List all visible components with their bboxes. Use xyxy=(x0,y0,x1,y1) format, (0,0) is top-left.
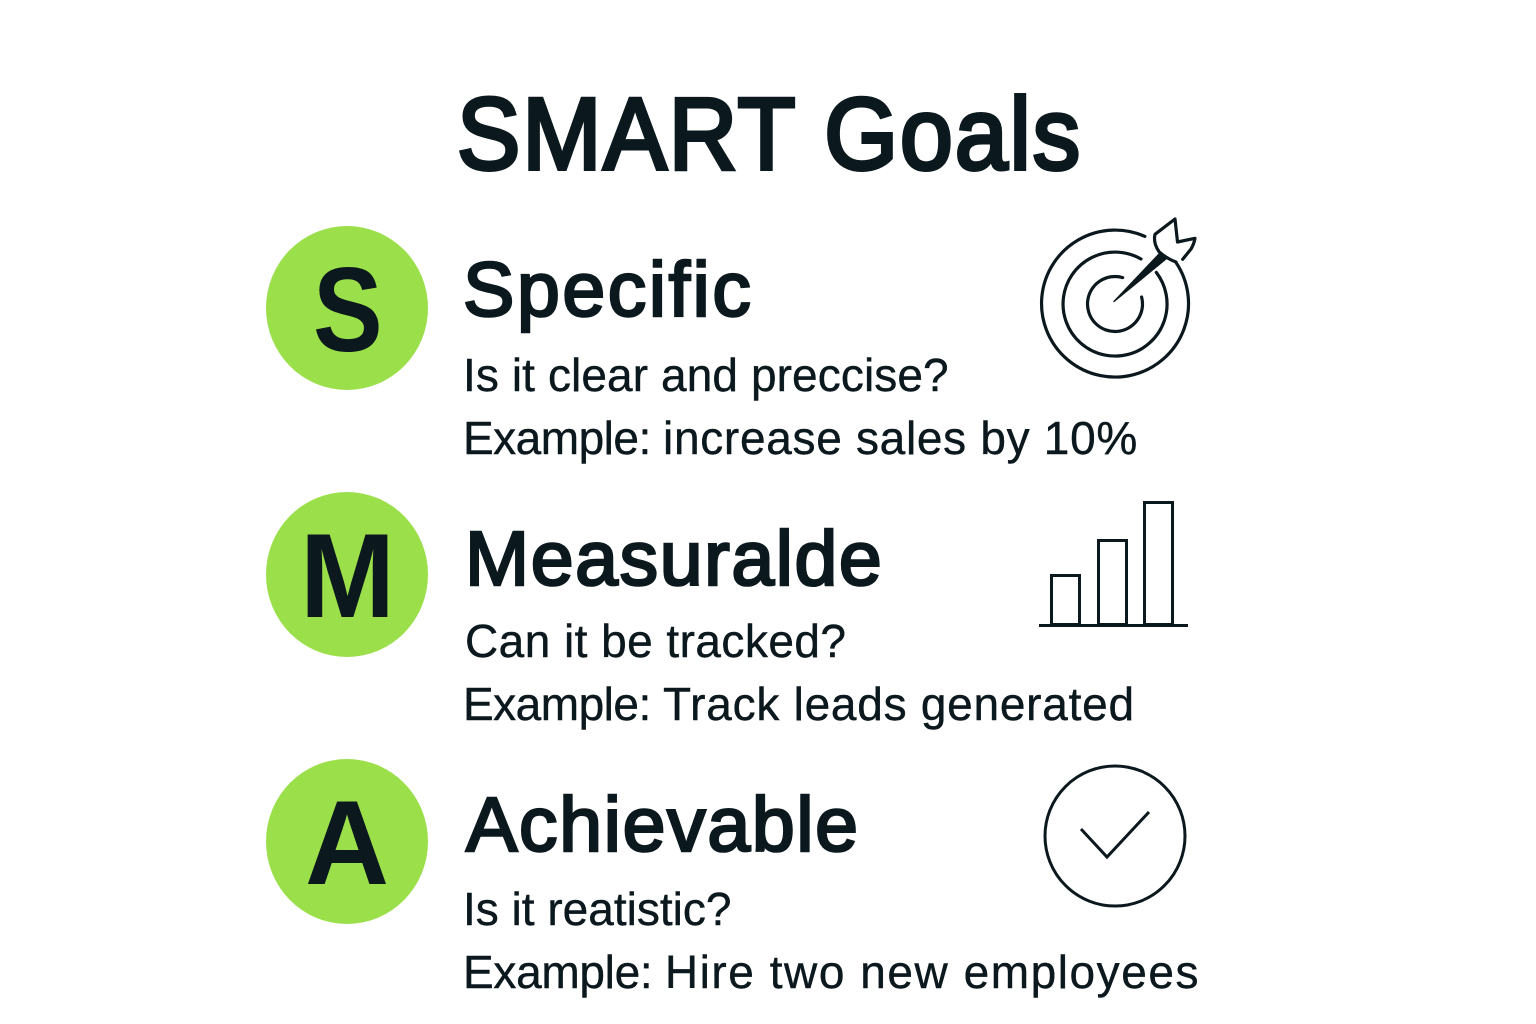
heading: Measuralde: Measuralde xyxy=(465,516,883,602)
badge: M: M xyxy=(300,509,395,643)
heading: Achievable: Achievable xyxy=(466,782,860,868)
badge: M xyxy=(266,492,428,657)
text: Measurable question: Can it be tracked? xyxy=(465,615,846,667)
heading: Specific: Specific xyxy=(463,247,753,333)
icon: target with arrow xyxy=(1040,217,1197,379)
text: Specific example: Example: increase sales by 10% xyxy=(463,412,1138,464)
text: Specific question: Is it clear and preccise? xyxy=(463,349,949,401)
icon: bar chart xyxy=(1039,501,1188,627)
badge: A: A xyxy=(305,776,389,910)
text: Achievable question: Is it reatistic? xyxy=(463,883,731,935)
icon: check mark in circle xyxy=(1044,764,1186,908)
badge: S: S xyxy=(313,243,383,377)
badge: A xyxy=(266,759,428,924)
text: Measurable example: Example: Track leads generated xyxy=(463,678,1135,730)
badge: S xyxy=(266,226,428,390)
text: Achievable example: Example: Hire two new employees xyxy=(463,946,1200,998)
title: SMART Goals xyxy=(457,77,1082,191)
